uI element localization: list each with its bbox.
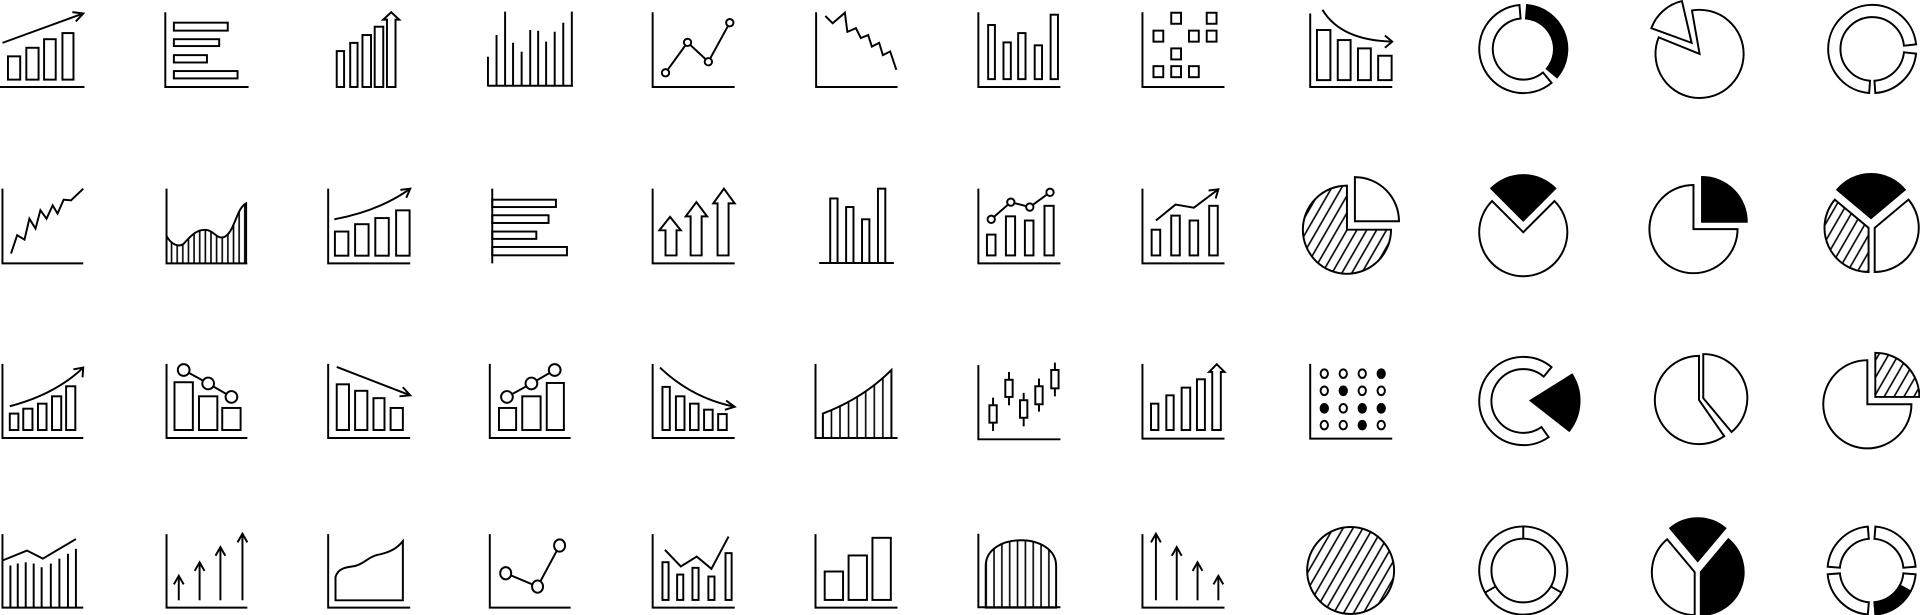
icon: three up arrows <box>653 189 735 263</box>
icon: split pie <box>1655 354 1747 444</box>
icon: dome hatched chart <box>978 534 1060 608</box>
icon: donut with black segment <box>1479 5 1567 93</box>
icon: line with three points <box>490 534 571 608</box>
icon: segmented ring <box>1828 5 1916 93</box>
icon: horizontal bars from axis <box>492 189 567 263</box>
icon: divided donut <box>1479 526 1567 615</box>
icon: bars with point line <box>978 189 1060 263</box>
icon: line over thin bars <box>2 534 83 608</box>
icon: four rising arrows <box>167 534 247 608</box>
icon: growing bars with arrow <box>337 12 399 87</box>
icon: Y pie with black sectors <box>1652 518 1744 615</box>
icon: hatched circle <box>1307 527 1394 614</box>
icon: horizontal bar chart <box>165 12 249 87</box>
icon: scatter squares <box>1142 12 1224 87</box>
icon: declining bars with points <box>167 364 247 438</box>
icon: pie with black top wedge <box>1479 175 1567 276</box>
icon: hatched pie with exploded quadrant <box>1303 177 1399 274</box>
icon: area chart <box>328 534 410 608</box>
icon: growing bars with curve arrow <box>2 364 83 438</box>
icon: bars with curved arrow <box>328 189 410 263</box>
icon: ring with black wedge <box>1479 357 1580 445</box>
icon: declining bars with arrow <box>328 364 410 438</box>
icon: pie with black quadrant <box>1649 177 1747 273</box>
icon: bars with trend arrow <box>1142 189 1224 263</box>
icon: pie with exploded slice <box>1651 1 1744 98</box>
icon: three-part pie <box>1825 174 1919 272</box>
icon: wave area chart <box>167 189 247 263</box>
icon: simple bar chart <box>819 189 894 263</box>
icon: four-part ring <box>1828 527 1916 615</box>
icon: candlestick chart <box>978 363 1060 439</box>
icon: rising bars with points <box>490 364 571 438</box>
icon: growing bars with arrow bar <box>1142 364 1224 439</box>
icon: pie with hatched quadrant <box>1823 353 1919 448</box>
icon: thin line bars <box>487 12 573 86</box>
icon: declining bars with curved arrow <box>1310 10 1392 87</box>
icon: three bars <box>816 534 898 608</box>
icon: bars with zigzag line <box>653 534 735 608</box>
icon: rising zigzag line <box>2 189 83 263</box>
icon: hatched growth area <box>816 364 898 438</box>
icon: vertical bar chart <box>978 12 1060 87</box>
icon: decreasing bars with curve arrow <box>653 364 735 438</box>
icon: line chart with points <box>653 12 735 87</box>
icon: four declining arrows <box>1142 534 1224 608</box>
icon: dot matrix <box>1310 364 1392 439</box>
icon: bar chart with rising arrow <box>0 12 84 87</box>
icon: declining zigzag line <box>816 12 898 87</box>
